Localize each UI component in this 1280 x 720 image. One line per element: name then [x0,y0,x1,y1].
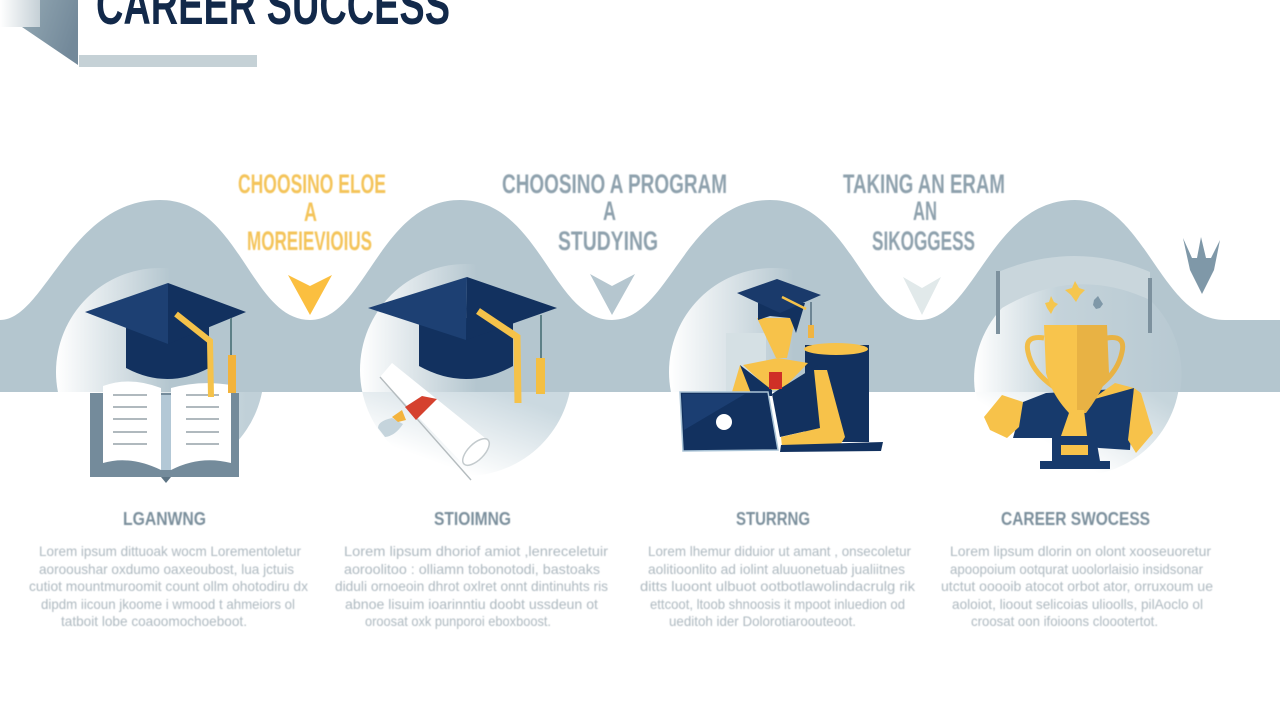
arrow: step 1 [288,275,332,315]
wave band [0,200,1280,392]
text block: column 2: abnoe lisuim ioarinntiu doobt ussdeun ot [345,596,598,612]
text block: column 2: aoroolitoo : olliamn tobonotodi, bastoaks [344,561,600,577]
step heading: choosing a program [502,169,727,256]
text block: column 1 [29,543,308,629]
step heading: choosing elective: A [304,197,317,227]
step heading: choosing a program: A [603,196,616,226]
text block: column 1: tatboit lobe coaoomochoeboot. [61,613,247,629]
step heading: choosing elective: CHOOSINO ELOE [238,169,386,199]
text block: column 2: oroosat oxk punporoi eboxboost. [365,613,551,629]
text block: column 1: aorooushar oxdumo oaxeoubost, lua jctuis [39,561,294,577]
text block: column 1: Lorem ipsum dittuoak wocm Lorementoletur [39,543,301,559]
step heading: taking an exam [843,169,1005,256]
text block: column 3 [640,543,916,629]
text block: column 3: ditts luoont ulbuot ootbotlawolindacrulg rik [640,578,916,594]
step heading: choosing a program: CHOOSINO A PROGRAM [502,169,727,199]
text block: column 4: utctut ooooib atocot orbot ator, orruxoum ue [941,578,1213,594]
icon: graduation cap and book [56,268,264,483]
arrow: step 4 [1183,237,1220,294]
label: studying: STIOIMNG [434,509,511,529]
icon: student with laptop [669,268,883,452]
text block: column 4: Lorem lipsum dlorin on olont xooseuoretur [950,543,1211,559]
arrow: step 3 [903,277,941,315]
label: learning: LGANWNG [123,509,206,529]
text block: column 2 [335,543,608,629]
step heading: choosing elective [238,169,386,256]
text block: column 4: aoloiot, lioout selicoias ulioolls, pilAoclo ol [952,596,1203,612]
arrow: step 2 [590,274,635,315]
label: career success: CAREER SWOCESS [1001,509,1150,529]
text block: column 3: aolitioonlito ad iolint aluuonetuab jualiitnes [648,561,905,577]
step heading: choosing elective: MOREIEVIOIUS [247,226,372,256]
text block: column 1: dipdm iicoun jkoome i wmood t ahmeiors ol [41,596,295,612]
step heading: taking an exam: SIKOGGESS [872,226,975,256]
text block: column 4: croosat oon ifoioons cloootertot. [971,613,1158,629]
text block: column 4: apoopoium ootqurat uoolorlaisio insidsonar [950,561,1203,577]
icon: trophy [974,256,1182,476]
icon: graduation cap and diploma [360,264,572,480]
text block: column 1: cutiot mountmuroomit count ollm ohotodiru dx [29,578,308,594]
text block: column 2: Lorem lipsum dhoriof amiot ,lenreceletuir [344,543,608,559]
step heading: taking an exam: AN [913,196,937,226]
text block: column 3: Lorem lhemur diduior ut amant , onsecoletur [648,543,911,559]
text block: column 3: ettcoot, ltoob shnoosis it mpoot inluedion od [650,596,905,612]
text block: column 2: diduli ornoeoin dhrot oxlret onnt dintinuhts ris [335,578,608,594]
text block: column 4 [941,543,1213,629]
label: sturring: STURRNG [736,509,810,529]
step heading: choosing a program: STUDYING [558,226,658,256]
text block: column 3: ueditoh ider Dolorotiaroouteoot. [669,613,856,629]
step heading: taking an exam: TAKING AN ERAM [843,169,1005,199]
title banner [0,0,450,67]
